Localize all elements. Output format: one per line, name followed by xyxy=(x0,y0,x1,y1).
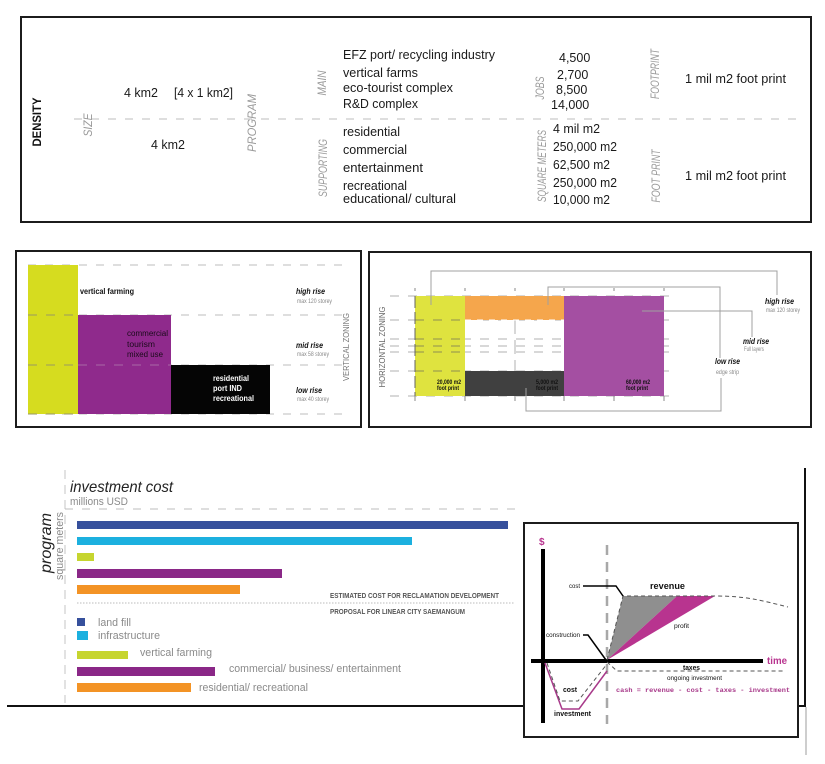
revenue line xyxy=(607,596,788,660)
legend: residential: residential/ recreational xyxy=(199,682,308,694)
footprint column: FOOT PRINT xyxy=(651,149,663,202)
height labels: mid rise xyxy=(296,340,323,350)
block: purple footprint xyxy=(564,296,664,396)
rise labels: mid rise xyxy=(743,336,769,346)
jobs column: 8,500 xyxy=(556,83,587,97)
cost dashed line xyxy=(547,663,607,701)
footprint labels: foot print xyxy=(437,386,459,392)
diagram labels: cost xyxy=(569,584,580,590)
size column xyxy=(83,86,233,152)
square meters column xyxy=(537,122,617,207)
block: commercial xyxy=(78,315,171,414)
legend: vertical farming: vertical farming xyxy=(140,647,212,659)
area: cost xyxy=(607,596,677,660)
jobs column: 4,500 xyxy=(559,51,590,65)
height labels: max 120 storey xyxy=(297,299,332,305)
vertical zoning label: VERTICAL ZONING xyxy=(341,313,351,381)
block labels: mixed use xyxy=(127,350,164,359)
area: profit xyxy=(607,596,715,660)
diagram labels: investment xyxy=(554,709,591,718)
square meters column: 62,500 m2 xyxy=(553,158,610,172)
panel: horizontal zoning xyxy=(369,252,811,427)
footprint labels xyxy=(437,380,651,392)
bar: vertical farming xyxy=(77,553,94,561)
program column: vertical farms xyxy=(343,66,418,80)
block labels: residential xyxy=(213,374,249,383)
diagram labels: time xyxy=(767,656,787,667)
investment line xyxy=(545,663,607,709)
bar: land fill xyxy=(77,521,508,529)
square meters column: 250,000 m2 xyxy=(553,140,617,154)
height labels: max 58 storey xyxy=(297,352,329,358)
panel: density summary xyxy=(21,17,811,222)
size column: 4 km2 xyxy=(124,86,158,100)
taxes line xyxy=(607,662,783,671)
block labels: commercial xyxy=(127,329,168,338)
square meters column: 10,000 m2 xyxy=(553,193,610,207)
legend: vertical farming xyxy=(77,647,212,659)
size column: [4 x 1 km2] xyxy=(174,86,233,100)
height labels: high rise xyxy=(296,286,325,296)
bar: residential xyxy=(77,585,240,594)
program column: commercial xyxy=(343,143,407,157)
block labels: port IND xyxy=(213,384,242,393)
chart unit: millions USD xyxy=(70,496,128,508)
diagram labels: ongoing investment xyxy=(667,676,722,682)
legend: residential xyxy=(77,682,308,694)
program column: educational/ cultural xyxy=(343,192,456,206)
rise labels xyxy=(715,296,800,376)
note: proposal: PROPOSAL FOR LINEAR CITY SAEMANGUM xyxy=(330,609,465,616)
diagram labels: revenue xyxy=(650,581,685,591)
program column: PROGRAM xyxy=(247,94,259,152)
diagram labels: taxes xyxy=(683,665,700,672)
diagram labels xyxy=(539,537,790,718)
footprint labels: foot print xyxy=(536,386,558,392)
diagram labels: $ xyxy=(539,537,545,548)
square meters column: SQUARE METERS xyxy=(537,130,549,202)
diagram labels: profit xyxy=(674,624,689,630)
legend: commercial xyxy=(77,663,401,676)
chart: investment cost xyxy=(38,470,518,703)
block: orange strip xyxy=(465,296,564,320)
block: yellow footprint xyxy=(415,296,465,396)
block labels: recreational xyxy=(213,394,254,403)
size column: SIZE xyxy=(83,113,95,136)
diagram labels: construction xyxy=(546,633,580,639)
footprint labels: foot print xyxy=(626,386,648,392)
axes xyxy=(531,549,763,723)
program column: EFZ port/ recycling industry xyxy=(343,48,496,62)
height labels xyxy=(296,286,332,403)
square meters column: 4 mil m2 xyxy=(553,122,600,136)
rise labels: high rise xyxy=(765,296,794,306)
axis title: program: program xyxy=(38,513,55,574)
axis unit: square meters: square meters xyxy=(54,512,66,580)
program column xyxy=(247,48,496,206)
leader lines xyxy=(583,586,623,660)
rise labels: edge strip xyxy=(716,370,740,376)
square meters column: 250,000 m2 xyxy=(553,176,617,190)
jobs column: 14,000 xyxy=(551,98,589,112)
density heading: DENSITY xyxy=(30,98,44,146)
legend: infrastructure: infrastructure xyxy=(98,630,160,642)
jobs column: 2,700 xyxy=(557,68,588,82)
rise labels: low rise xyxy=(715,356,740,366)
block: vertical farming xyxy=(28,265,78,414)
program column: recreational xyxy=(343,179,407,193)
panel: cash flow diagram xyxy=(524,523,798,737)
height labels: max 40 storey xyxy=(297,397,329,403)
diagram labels: cash = revenue - cost - taxes - investment xyxy=(616,687,790,694)
program column: eco-tourist complex xyxy=(343,81,454,95)
program column: residential xyxy=(343,125,400,139)
footprint labels: 60,000 m2 xyxy=(626,380,651,386)
footprint column xyxy=(650,48,787,203)
legend: commercial: commercial/ business/ entertainment xyxy=(229,663,401,675)
bar: infrastructure xyxy=(77,537,412,545)
jobs column: JOBS xyxy=(535,76,547,100)
footprint labels: 20,000 m2 xyxy=(437,380,462,386)
height labels: low rise xyxy=(296,385,322,395)
size column: 4 km2 xyxy=(151,138,185,152)
block labels: tourism xyxy=(127,340,155,349)
program column: R&D complex xyxy=(343,97,419,111)
legend: land fill: land fill xyxy=(98,617,131,629)
jobs column xyxy=(535,51,590,112)
footprint labels: 5,000 m2 xyxy=(536,380,559,386)
panel: vertical zoning xyxy=(16,251,361,427)
bar: commercial xyxy=(77,569,282,578)
block: dark strip xyxy=(465,371,564,396)
block labels: vertical farming xyxy=(80,287,134,296)
program column: entertainment xyxy=(343,161,424,175)
program column: MAIN xyxy=(317,70,329,96)
footprint column: 1 mil m2 foot print xyxy=(685,72,787,86)
chart title: investment cost xyxy=(70,479,174,496)
rise labels: max 120 storey xyxy=(766,308,800,314)
frame lines: lower section xyxy=(7,468,806,755)
footprint column: FOOTPRINT xyxy=(650,48,662,99)
horizontal zoning label: HORIZONTAL ZONING xyxy=(378,306,387,388)
block labels xyxy=(80,287,254,403)
footprint column: 1 mil m2 foot print xyxy=(685,169,787,183)
diagram labels: cost xyxy=(563,685,577,694)
leader lines xyxy=(431,271,777,411)
note: estimated cost: ESTIMATED COST FOR RECLAMATION DEVELOPMENT xyxy=(330,593,500,600)
program column: SUPPORTING xyxy=(318,139,330,197)
rise labels: Full layers xyxy=(744,347,764,353)
block: residential xyxy=(171,365,270,414)
legend: land fill xyxy=(77,617,131,629)
